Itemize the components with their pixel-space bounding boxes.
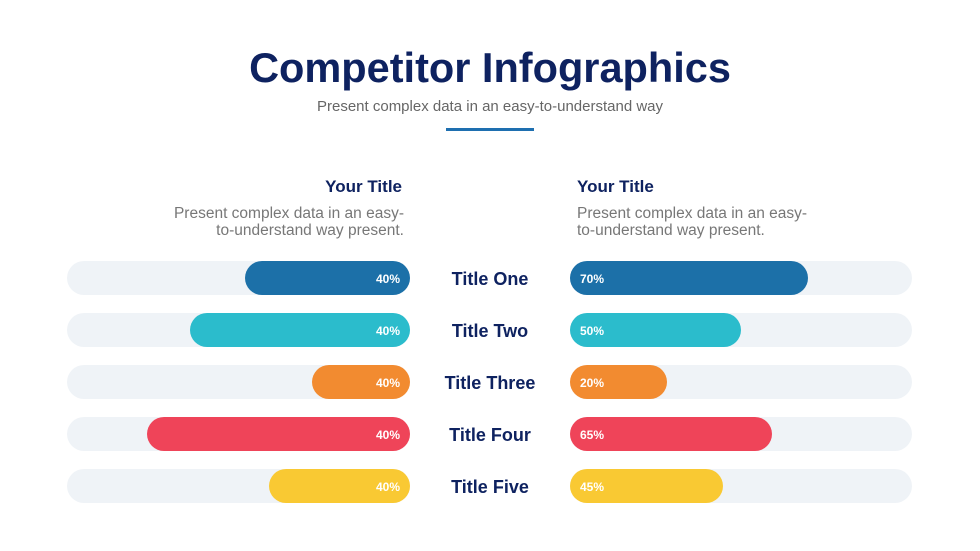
right description <box>577 205 807 239</box>
row 3: 40% <box>376 376 400 390</box>
row 3 <box>67 365 912 399</box>
row 3: Title Three <box>445 373 535 393</box>
row 4: 40% <box>376 428 400 442</box>
row 5: 45% <box>580 480 604 494</box>
row 5: 40% <box>376 480 400 494</box>
row 5: Title Five <box>451 477 529 497</box>
row 1: Title One <box>452 269 528 289</box>
right description: to-understand way present. <box>577 222 765 239</box>
row 4: Title Four <box>449 425 531 445</box>
left description <box>174 205 404 239</box>
row 1 <box>67 261 912 295</box>
row 2: Title Two <box>452 321 528 341</box>
right description: Present complex data in an easy- <box>577 205 807 222</box>
row 2 <box>67 313 912 347</box>
left description: to-understand way present. <box>216 222 404 239</box>
subtitle: Present complex data in an easy-to-understand way <box>317 98 663 115</box>
row 4: 65% <box>580 428 604 442</box>
row 2: 50% <box>580 324 604 338</box>
row 2: 40% <box>376 324 400 338</box>
left description: Present complex data in an easy- <box>174 205 404 222</box>
row 1: 40% <box>376 272 400 286</box>
title: Competitor Infographics <box>249 44 731 91</box>
row 4 <box>67 417 912 451</box>
left heading: Your Title <box>325 177 402 196</box>
row 5 <box>67 469 912 503</box>
underline <box>446 128 534 131</box>
row 1: 70% <box>580 272 604 286</box>
row 3: 20% <box>580 376 604 390</box>
right heading: Your Title <box>577 177 654 196</box>
